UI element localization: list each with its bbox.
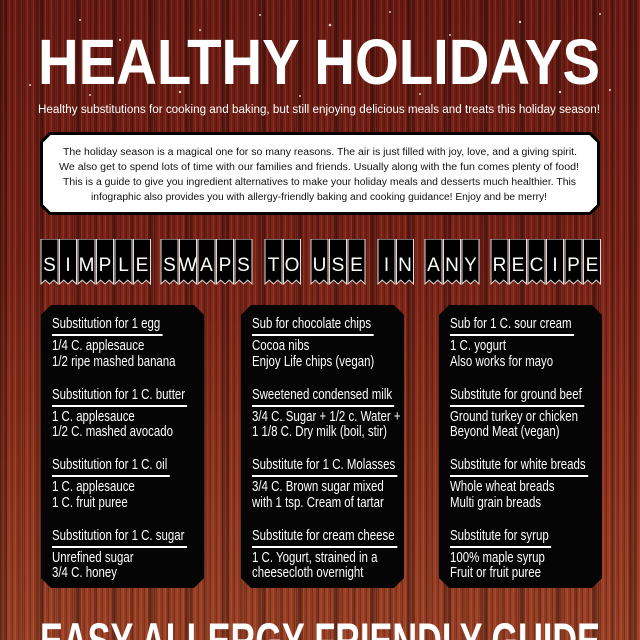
intro text: We also get to spend lots of time with our families and friends. Usually along with the fun comes plenty of food! <box>59 162 579 173</box>
banner: simple swaps to use in any recipe: W <box>179 255 197 276</box>
banner: simple swaps to use in any recipe: M <box>79 255 94 276</box>
card: column 2: 1 1/8 C. Dry milk (boil, stir) <box>252 424 387 440</box>
intro box <box>40 132 600 215</box>
card: column 1: 1/4 C. applesauce <box>52 338 144 354</box>
card: column 1: Substitution for 1 C. butter <box>52 386 185 402</box>
banner: simple swaps to use in any recipe: P <box>219 255 231 276</box>
card: column 1: Substitution for 1 C. oil <box>52 457 167 473</box>
card: column 1: 1 C. applesauce <box>52 479 135 495</box>
banner: simple swaps to use in any recipe: E <box>586 255 598 276</box>
banner: simple swaps to use in any recipe <box>40 239 601 285</box>
banner: simple swaps to use in any recipe: I <box>552 255 558 276</box>
intro text: This is a guide to give you ingredient alternatives to make your holiday meals and desserts much healthier. This <box>63 177 576 188</box>
card: column 3: Whole wheat breads <box>450 479 554 495</box>
card: column 2: Sub for chocolate chips <box>252 316 371 332</box>
card: column 2: Substitute for 1 C. Molasses <box>252 457 395 473</box>
banner: simple swaps to use in any recipe: S <box>332 255 344 276</box>
card: column 3 <box>439 305 602 588</box>
banner: simple swaps to use in any recipe: P <box>567 255 580 276</box>
banner: simple swaps to use in any recipe: E <box>512 255 524 276</box>
card: column 2 <box>241 305 404 588</box>
banner: simple swaps to use in any recipe: N <box>398 255 412 276</box>
card: column 2: Sweetened condensed milk <box>252 386 392 402</box>
banner: simple swaps to use in any recipe: O <box>285 255 299 276</box>
card: column 2: Enjoy Life chips (vegan) <box>252 354 374 370</box>
card: column 1: 1 C. applesauce <box>52 408 135 424</box>
card: column 3: Substitute for white breads <box>450 457 586 473</box>
banner: simple swaps to use in any recipe: P <box>99 255 111 276</box>
intro text: The holiday season is a magical one for so many reasons. The air is just filled with joy, love, and a giving spirit. <box>63 147 577 158</box>
banner: simple swaps to use in any recipe: E <box>350 255 363 276</box>
banner: simple swaps to use in any recipe: A <box>427 255 440 276</box>
banner: simple swaps to use in any recipe: I <box>384 255 389 276</box>
card: column 1: 1 C. fruit puree <box>52 494 128 510</box>
banner: simple swaps to use in any recipe: A <box>200 255 213 276</box>
card: column 1: 3/4 C. honey <box>52 565 117 581</box>
banner: simple swaps to use in any recipe: N <box>445 255 459 276</box>
banner: simple swaps to use in any recipe: Y <box>464 255 477 276</box>
card: column 3: Multi grain breads <box>450 494 541 510</box>
card: column 2: 3/4 C. Sugar + 1/2 c. Water + <box>252 408 401 424</box>
card: column 1 <box>41 305 204 588</box>
banner: simple swaps to use in any recipe: C <box>530 255 543 276</box>
card: column 3: Substitute for syrup <box>450 528 549 544</box>
card: column 3: Sub for 1 C. sour cream <box>450 316 572 332</box>
card: column 3: Beyond Meat (vegan) <box>450 424 560 440</box>
card: column 3: Also works for mayo <box>450 354 553 370</box>
card: column 1: Substitution for 1 C. sugar <box>52 528 184 544</box>
card: column 2: 1 C. Yogurt, strained in a <box>252 550 377 566</box>
card: column 1: 1/2 C. mashed avocado <box>52 424 173 440</box>
banner: simple swaps to use in any recipe: E <box>136 255 148 276</box>
banner: simple swaps to use in any recipe: S <box>237 255 250 276</box>
sparkles <box>29 11 611 97</box>
card: column 1: Unrefined sugar <box>52 550 134 566</box>
banner: simple swaps to use in any recipe: I <box>65 255 71 276</box>
intro text: infographic also provides you with allergy-friendly baking and cooking guidance! Enjoy and be merry! <box>91 192 547 203</box>
intro text <box>59 147 579 203</box>
card: column 3: 1 C. yogurt <box>450 338 506 354</box>
banner: simple swaps to use in any recipe: U <box>313 255 326 276</box>
banner: simple swaps to use in any recipe: R <box>493 255 506 276</box>
card: column 2: with 1 tsp. Cream of tartar <box>252 494 384 510</box>
card: column 2: cheesecloth overnight <box>252 565 363 581</box>
subtitle: Healthy substitutions for cooking and baking, but still enjoying delicious meals and treats this holiday season! <box>38 104 600 116</box>
card: column 3: Substitute for ground beef <box>450 386 582 402</box>
card: column 3: 100% maple syrup <box>450 550 545 566</box>
card: column 3: Fruit or fruit puree <box>450 565 541 581</box>
card: column 1: 1/2 ripe mashed banana <box>52 354 176 370</box>
banner: simple swaps to use in any recipe: S <box>163 255 176 276</box>
card: column 2: Substitute for cream cheese <box>252 528 395 544</box>
banner: simple swaps to use in any recipe: S <box>43 255 56 276</box>
banner: simple swaps to use in any recipe: L <box>118 255 129 276</box>
card: column 2: Cocoa nibs <box>252 338 309 354</box>
card: column 2: 3/4 C. Brown sugar mixed <box>252 479 384 495</box>
banner: simple swaps to use in any recipe: T <box>268 255 280 276</box>
card: column 1: Substitution for 1 egg <box>52 316 160 332</box>
card: column 3: Ground turkey or chicken <box>450 408 578 424</box>
